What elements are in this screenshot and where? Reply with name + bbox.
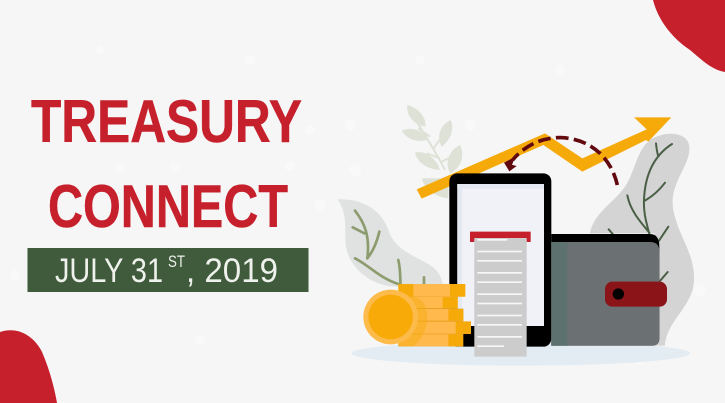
plant: back top leaves	[402, 105, 462, 198]
title: connect: CONNECT	[48, 173, 288, 240]
date band: ST	[168, 253, 185, 271]
coins	[363, 284, 475, 346]
plant: left leaf	[337, 199, 443, 287]
trend arrow	[417, 117, 671, 199]
front coin	[363, 290, 418, 344]
plant: right leaf	[590, 134, 694, 346]
date band: , 2019	[186, 252, 278, 290]
illustration	[337, 105, 694, 366]
corner: bottom left blob	[0, 330, 57, 403]
title: treasury: TREASURY	[31, 88, 302, 155]
corner: top right blob	[653, 0, 725, 72]
date band: JULY 31	[55, 252, 163, 290]
date band	[28, 248, 308, 292]
tablet	[449, 173, 551, 347]
wallet clasp	[605, 282, 667, 307]
wallet	[551, 234, 667, 346]
receipt	[470, 232, 531, 357]
ground ellipse	[351, 341, 690, 366]
dashed loop arrow	[504, 138, 617, 185]
